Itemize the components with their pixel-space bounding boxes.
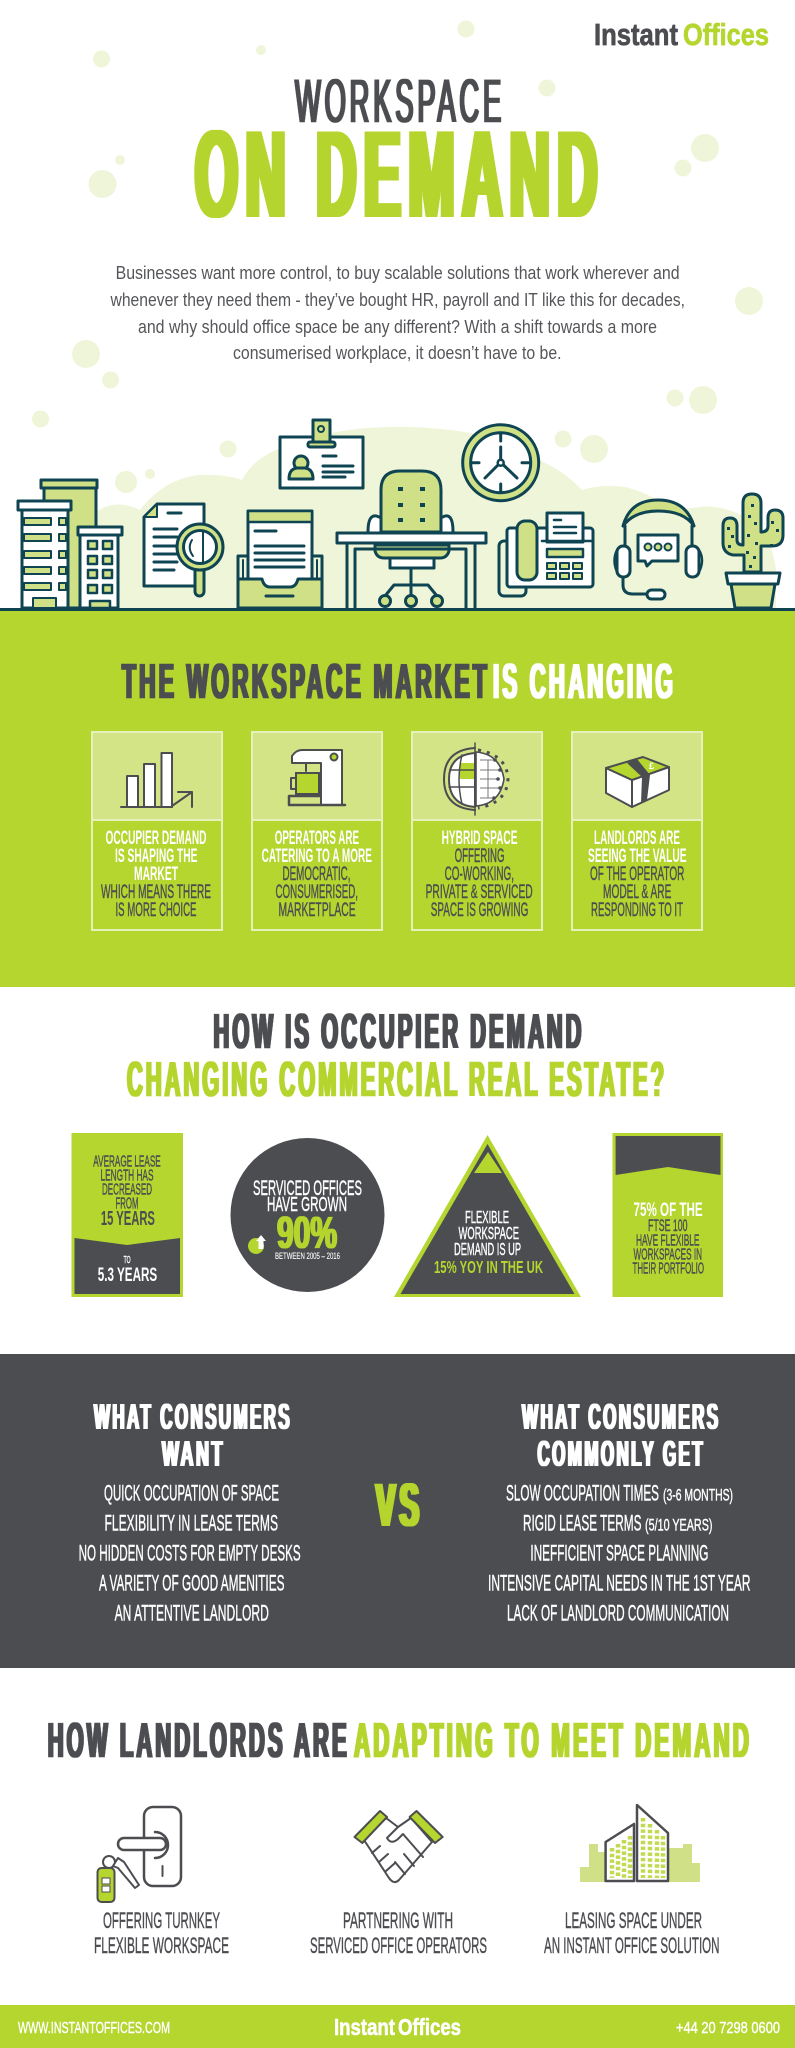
- footer logo: Offices: [398, 2014, 461, 2040]
- column: what consumers want: NO HIDDEN COSTS FOR EMPTY DESKS: [79, 1540, 301, 1566]
- item: leasing space: [544, 1805, 720, 1958]
- icon: handshake: [354, 1811, 443, 1882]
- footer: WWW.INSTANTOFFICES.COM: [18, 2020, 170, 2037]
- background bubbles: [32, 20, 763, 493]
- card: landlords: MODEL & ARE: [603, 882, 671, 903]
- card: operators: OPERATORS ARE: [275, 828, 359, 849]
- card: hybrid space: HYBRID SPACE: [442, 828, 518, 849]
- stat: lease length card: 15 YEARS: [101, 1208, 155, 1230]
- stat: lease length card: 5.3 YEARS: [98, 1265, 157, 1286]
- stat: FTSE 100 card: THEIR PORTFOLIO: [632, 1260, 704, 1278]
- intro paragraph: and why should office space be any different? With a shift towards a more: [138, 317, 657, 337]
- card: hybrid space: PRIVATE & SERVICED: [426, 882, 533, 903]
- logo: Instant Offices: Instant: [594, 17, 678, 52]
- stat: flexible workspace triangle: DEMAND IS UP: [454, 1239, 521, 1259]
- column: what consumers commonly get: SLOW OCCUPATION TIMES: [506, 1480, 659, 1506]
- icon: growth arrow: [248, 1235, 266, 1254]
- stat: lease length card: LENGTH HAS: [100, 1168, 154, 1184]
- card: occupier demand: [92, 732, 222, 930]
- icon: rising bars: [121, 753, 192, 807]
- heading: how is occupier demand changing: [127, 1005, 667, 1107]
- icon: globe and circuits: [444, 743, 508, 815]
- icon: desk and chair: [337, 471, 486, 608]
- icon: coffee machine: [289, 750, 345, 805]
- footer: [0, 2005, 795, 2048]
- card: landlords: [572, 732, 702, 930]
- card: operators: [252, 732, 382, 930]
- stat: FTSE 100 card: 75% OF THE: [634, 1200, 703, 1221]
- logo: Instant Offices: Offices: [683, 17, 769, 52]
- card: occupier demand: IS MORE CHOICE: [116, 900, 196, 921]
- column: what consumers want: AN ATTENTIVE LANDLORD: [115, 1600, 269, 1626]
- item: partnering with operators: [310, 1811, 487, 1958]
- column: what consumers want: FLEXIBILITY IN LEASE TERMS: [104, 1510, 278, 1536]
- item: turnkey workspace: OFFERING TURNKEY: [103, 1908, 220, 1933]
- title: WORKSPACE: [295, 67, 505, 135]
- column: what consumers commonly get: RIGID LEASE TERMS: [523, 1510, 642, 1536]
- illustration: office skyline: [18, 420, 783, 608]
- column: what consumers want: WANT: [162, 1433, 225, 1474]
- icon: fax and phone: [499, 513, 593, 596]
- icon: wall clock: [463, 425, 539, 501]
- card: hybrid space: OFFERING: [455, 846, 504, 867]
- card: operators: CATERING TO A MORE: [262, 846, 372, 867]
- stat: lease length card: FROM: [116, 1196, 138, 1212]
- card: landlords: SEEING THE VALUE: [588, 846, 687, 867]
- title: [195, 67, 605, 244]
- intro paragraph: whenever they need them - they’ve bought HR, payroll and IT like this for decades,: [110, 290, 685, 310]
- column: what consumers want: A VARIETY OF GOOD AMENITIES: [99, 1570, 284, 1596]
- stat: FTSE 100 card: HAVE FLEXIBLE: [636, 1232, 700, 1250]
- card: occupier demand: IS SHAPING THE: [115, 846, 198, 867]
- background blob: [96, 427, 776, 608]
- stat: lease length card: DECREASED: [102, 1182, 152, 1198]
- stat: serviced offices circle: BETWEEN 2005 – 2016: [275, 1251, 340, 1261]
- stat: flexible workspace triangle: [394, 1135, 581, 1297]
- logo: Instant Offices: [594, 17, 769, 52]
- card: occupier demand: WHICH MEANS THERE: [101, 882, 211, 903]
- card: landlords: OF THE OPERATOR: [590, 864, 684, 885]
- icon: cactus in pot: [723, 494, 783, 608]
- icon: office buildings: [18, 480, 122, 608]
- column: what consumers commonly get: (3-6 MONTHS): [663, 1486, 733, 1504]
- stat: FTSE 100 card: WORKSPACES IN: [634, 1246, 702, 1264]
- stat: lease length card: TO: [124, 1255, 131, 1266]
- stat: flexible workspace triangle: WORKSPACE: [458, 1223, 519, 1243]
- icon: document with magnifier: [144, 504, 223, 596]
- stat: serviced offices circle: HAVE GROWN: [267, 1194, 347, 1216]
- card: occupier demand: OCCUPIER DEMAND: [106, 828, 206, 849]
- card: occupier demand: MARKET: [134, 864, 178, 885]
- icon: city towers: [580, 1805, 700, 1882]
- card: hybrid space: [412, 732, 542, 930]
- intro paragraph: consumerised workplace, it doesn’t have to be.: [233, 343, 562, 363]
- heading: how landlords are adapting: HOW LANDLORDS ARE: [48, 1714, 350, 1768]
- item: turnkey workspace: FLEXIBLE WORKSPACE: [94, 1933, 229, 1958]
- stat: FTSE 100 card: [612, 1133, 723, 1297]
- card: operators: CONSUMERISED,: [276, 882, 358, 903]
- column: what consumers commonly get: [488, 1396, 750, 1626]
- icon: document tray: [238, 511, 322, 608]
- item: partnering with operators: PARTNERING WITH: [343, 1908, 453, 1933]
- card: landlords: RESPONDING TO IT: [591, 900, 683, 921]
- panel: consumers want vs get: WHAT CONSUMERS: [94, 1396, 292, 1437]
- panel: consumers want vs get: VS: [376, 1471, 423, 1539]
- card: landlords: LANDLORDS ARE: [594, 828, 680, 849]
- icon: door handle and key: [98, 1807, 181, 1902]
- stat: flexible workspace triangle: FLEXIBLE: [465, 1207, 509, 1227]
- footer logo: Instant: [334, 2014, 395, 2040]
- stat: lease length card: [72, 1133, 183, 1297]
- icon: headset with speech bubble: [614, 500, 702, 599]
- column: what consumers want: QUICK OCCUPATION OF SPACE: [104, 1480, 279, 1506]
- column: what consumers want: [79, 1396, 301, 1626]
- stat: FTSE 100 card: FTSE 100: [648, 1217, 688, 1235]
- stat: serviced offices circle: 90%: [277, 1207, 337, 1258]
- stat: lease length card: AVERAGE LEASE: [93, 1154, 161, 1170]
- intro paragraph: Businesses want more control, to buy scalable solutions that work wherever and: [116, 263, 680, 283]
- column: what consumers commonly get: (5/10 YEARS): [645, 1516, 712, 1534]
- stat: serviced offices circle: [230, 1138, 384, 1292]
- card: hybrid space: SPACE IS GROWING: [431, 900, 528, 921]
- card: operators: DEMOCRATIC,: [282, 864, 350, 885]
- stat: serviced offices circle: SERVICED OFFICES: [253, 1177, 362, 1200]
- card: hybrid space: CO-WORKING,: [445, 864, 514, 885]
- icon: id badge: [280, 420, 363, 488]
- intro paragraph: [110, 263, 685, 363]
- footer logo: [334, 2014, 461, 2040]
- icon: bundle of cash: £: [649, 761, 654, 771]
- card: operators: MARKETPLACE: [278, 900, 356, 921]
- panel: the workspace market is changing: [0, 608, 795, 987]
- icon: bundle of cash: [606, 757, 669, 807]
- panel: consumers want vs get: [0, 1354, 795, 1668]
- stat: flexible workspace triangle: 15% YOY IN THE UK: [434, 1257, 543, 1277]
- item: turnkey workspace: [94, 1807, 229, 1958]
- item: partnering with operators: SERVICED OFFICE OPERATORS: [310, 1933, 487, 1958]
